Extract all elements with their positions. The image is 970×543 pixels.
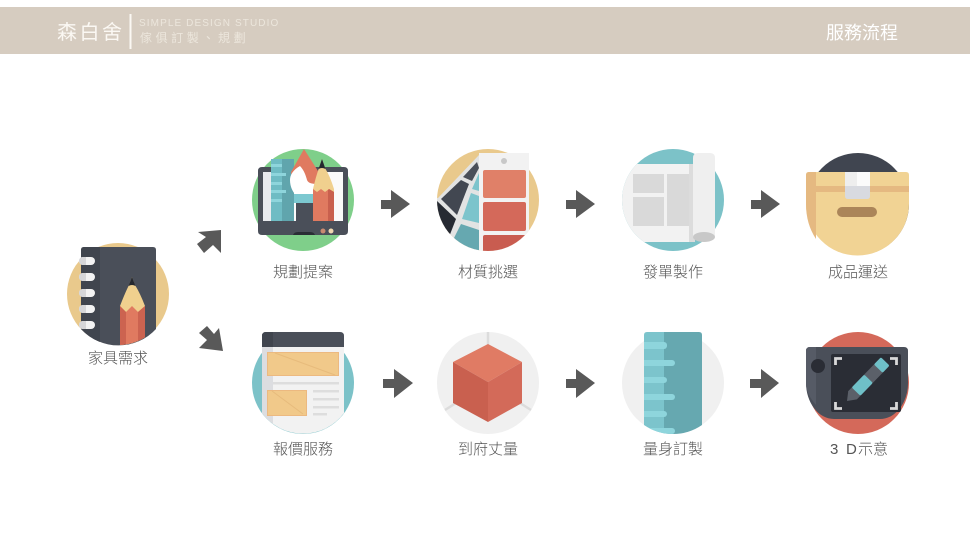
arrow (750, 369, 779, 398)
arrow (566, 190, 595, 218)
step: 量身訂製 (622, 332, 724, 458)
arrow: down-right (199, 326, 223, 351)
step: 報價服務 (252, 332, 354, 458)
arrow (566, 369, 595, 398)
step: 家具需求 (67, 243, 169, 367)
icon: material swatches (437, 149, 539, 251)
icon: drawing tablet (806, 332, 909, 434)
arrow: up-right (197, 230, 221, 253)
icon: monitor with design tools (252, 149, 354, 251)
label: 材質挑選 (458, 264, 518, 281)
icon: unrolling blueprint (620, 149, 724, 251)
arrow (751, 190, 780, 218)
brand name: 森白舍 (57, 21, 124, 44)
label: 發單製作 (643, 264, 703, 281)
arrow (381, 190, 410, 218)
label: 成品運送 (828, 264, 888, 281)
page title: 服務流程 (826, 23, 898, 43)
label: 3 D示意 (830, 441, 888, 458)
studio tagline: 傢俱訂製、規劃 (140, 30, 249, 45)
label: 報價服務 (273, 441, 333, 458)
step: 3D示意 (806, 332, 909, 458)
label: 到府丈量 (458, 441, 518, 458)
step: 規劃提案 (252, 149, 354, 281)
step: 成品運送 (806, 153, 909, 281)
studio tagline (139, 18, 279, 45)
label: 規劃提案 (273, 264, 333, 281)
step: 材質挑選 (430, 149, 539, 281)
icon: notebook and pencil (67, 243, 169, 350)
icon: ruler (622, 332, 724, 437)
step: 到府丈量 (437, 332, 539, 458)
label: 量身訂製 (643, 441, 703, 458)
arrow (383, 369, 413, 398)
icon: quote sheet (252, 332, 354, 434)
header bar (0, 7, 970, 54)
icon: cardboard box (806, 153, 909, 256)
step: 發單製作 (620, 149, 724, 281)
studio tagline: SIMPLE DESIGN STUDIO (139, 18, 279, 29)
icon: 3D cube (437, 332, 539, 434)
label: 家具需求 (88, 350, 148, 367)
